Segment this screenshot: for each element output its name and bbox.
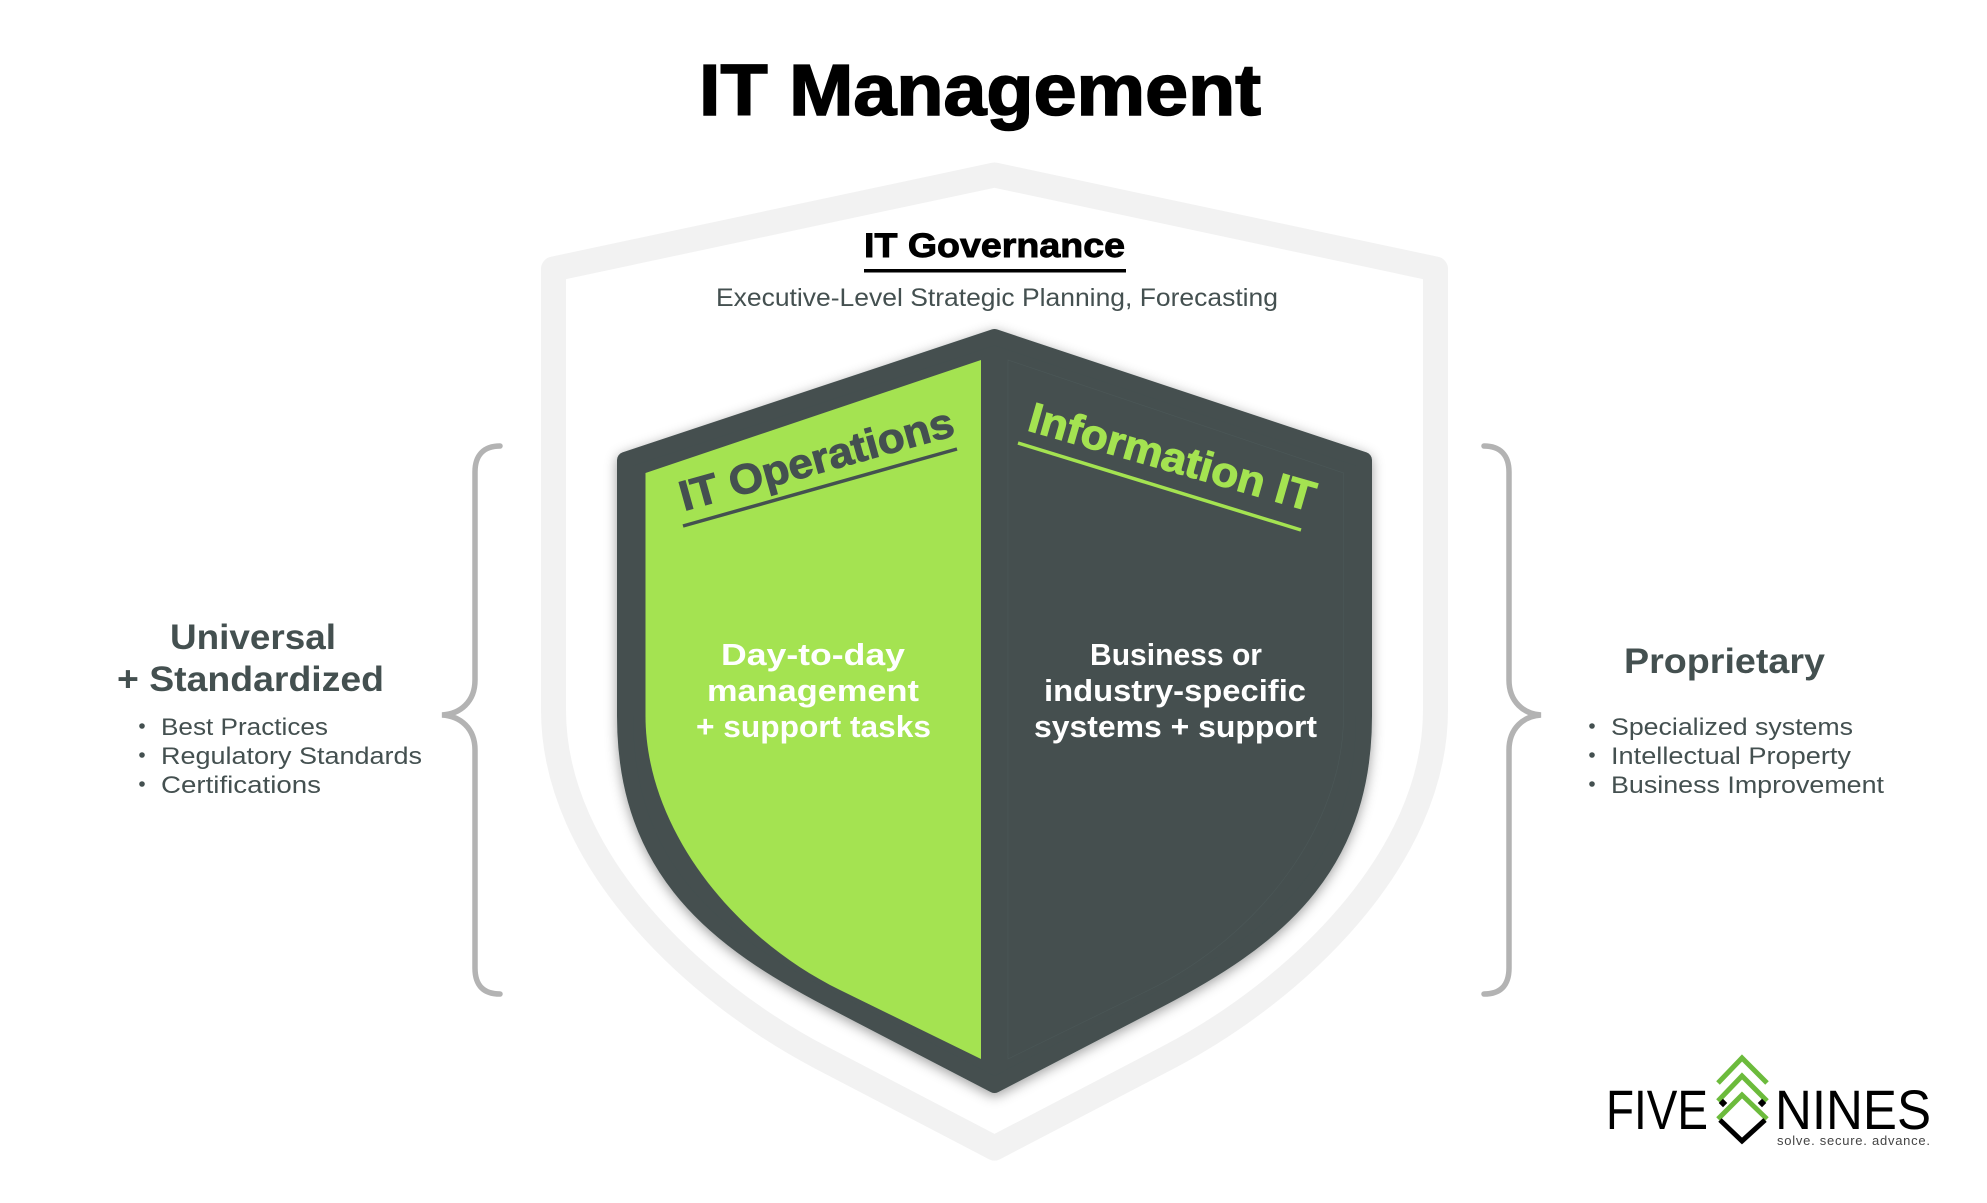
right brace bbox=[1484, 446, 1541, 994]
right heading: Proprietary bbox=[1624, 642, 1826, 681]
governance description: Executive-Level Strategic Planning, Forecasting bbox=[716, 284, 1278, 312]
left bullet list: Regulatory Standards bbox=[161, 743, 422, 770]
logo wordmark right: NINES bbox=[1775, 1078, 1931, 1141]
logo: Five Nines bbox=[1606, 1058, 1931, 1148]
Information IT description: industry-specific bbox=[1044, 673, 1306, 708]
IT Operations description: Day-to-day bbox=[721, 637, 906, 672]
right bullet list: Specialized systems bbox=[1611, 714, 1853, 741]
IT Operations description: management bbox=[707, 673, 919, 708]
logo wordmark left: FIVE bbox=[1606, 1078, 1708, 1141]
right bullet list bbox=[1589, 714, 1884, 799]
Information IT description: Business or bbox=[1090, 637, 1262, 672]
left bullet list: Certifications bbox=[161, 772, 321, 799]
IT Operations heading: IT Operations bbox=[674, 398, 959, 520]
panel: IT Operations green bbox=[646, 360, 981, 1059]
title: IT Management bbox=[699, 51, 1261, 131]
logo mark bbox=[1718, 1058, 1767, 1141]
IT Operations description bbox=[696, 637, 931, 744]
left heading: + Standardized bbox=[117, 660, 384, 699]
outer shield: IT Governance bbox=[554, 175, 1436, 1148]
shield body bbox=[625, 337, 1364, 1085]
left bullet list: Best Practices bbox=[161, 714, 328, 741]
inner shield bbox=[625, 337, 1364, 1085]
governance heading: IT Governance bbox=[864, 227, 1125, 265]
left brace bbox=[442, 446, 500, 994]
Information IT description: systems + support bbox=[1034, 709, 1317, 744]
left bullet list bbox=[139, 714, 422, 799]
panel: Information IT outline bbox=[1008, 360, 1344, 1059]
Information IT heading: Information IT bbox=[1024, 393, 1321, 520]
right bullet list: Business Improvement bbox=[1611, 772, 1884, 799]
Information IT description bbox=[1034, 637, 1317, 744]
left heading: Universal bbox=[170, 618, 336, 657]
left heading bbox=[117, 618, 384, 699]
right bullet list: Intellectual Property bbox=[1611, 743, 1851, 770]
IT Operations description: + support tasks bbox=[696, 709, 931, 744]
logo tagline: solve. secure. advance. bbox=[1777, 1133, 1930, 1148]
